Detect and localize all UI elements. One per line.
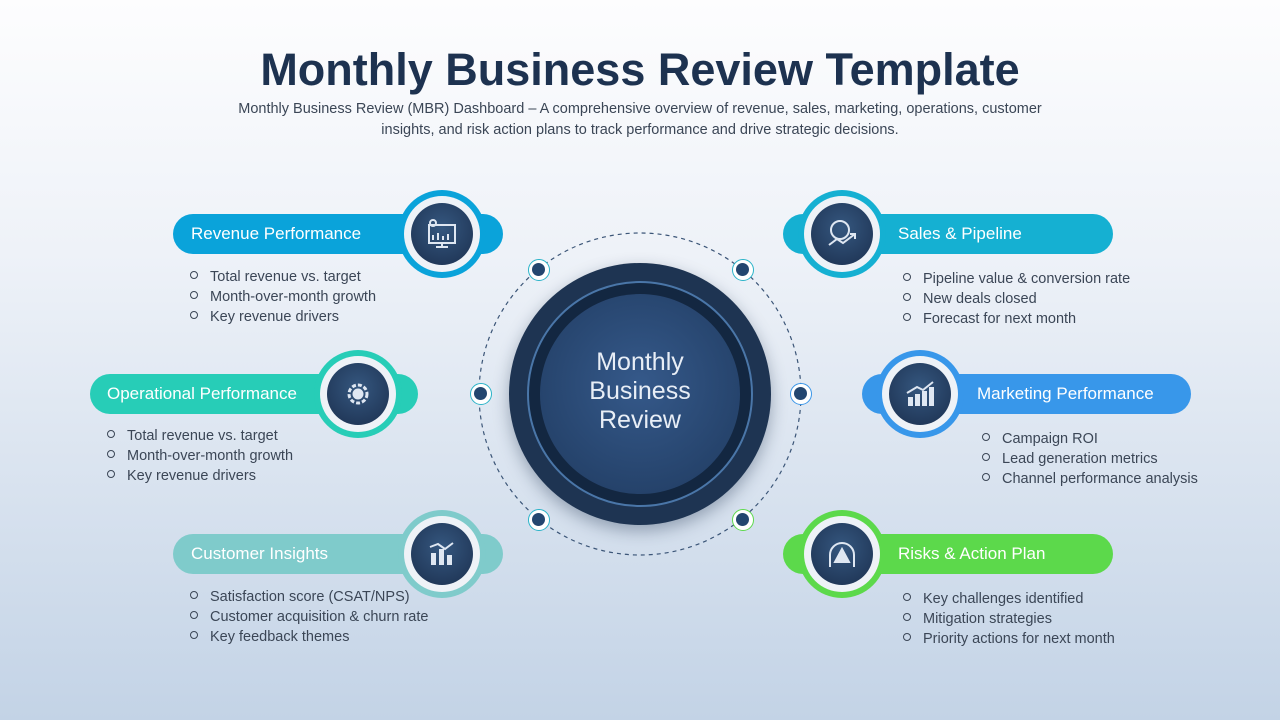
panel: customer insights — [173, 510, 503, 645]
panel: risks & action plan: Key challenges identified — [923, 591, 1083, 607]
panel: operational performance: Month-over-month growth — [127, 448, 293, 464]
panel: customer insights: Customer Insights — [191, 544, 328, 563]
dashed ring — [479, 232, 802, 556]
panel: revenue performance: Key revenue drivers — [210, 309, 339, 325]
hub text — [589, 348, 691, 434]
panel: revenue performance — [173, 190, 503, 325]
panel: customer insights: Key feedback themes — [210, 629, 349, 645]
panel: marketing performance: Marketing Performance — [977, 384, 1154, 403]
panel: customer insights: Customer acquisition & churn rate — [210, 609, 428, 625]
panel: sales & pipeline: Pipeline value & conversion rate — [923, 271, 1130, 287]
panel: revenue performance: Total revenue vs. target — [210, 269, 361, 285]
hub text: Monthly — [596, 348, 684, 376]
panel: risks & action plan: Priority actions for next month — [923, 631, 1115, 647]
panel: operational performance: Key revenue drivers — [127, 468, 256, 484]
hub text: Business — [589, 377, 691, 405]
panel: marketing performance: Campaign ROI — [1002, 431, 1098, 447]
panel: sales & pipeline: New deals closed — [923, 291, 1037, 307]
panel: sales & pipeline — [783, 190, 1130, 327]
panel: marketing performance: Channel performance analysis — [1002, 471, 1198, 487]
panel: operational performance: Total revenue vs. target — [127, 428, 278, 444]
panel: marketing performance: Lead generation metrics — [1002, 451, 1158, 467]
hub text: Review — [599, 406, 681, 434]
panel: operational performance: Operational Performance — [107, 384, 297, 403]
panel: customer insights: Satisfaction score (CSAT/NPS) — [210, 589, 410, 605]
panel: risks & action plan: Risks & Action Plan — [898, 544, 1045, 563]
panel: marketing performance — [862, 350, 1198, 487]
subtitle: Monthly Business Review (MBR) Dashboard – A comprehensive overview of revenue, sales, marketing, operations, customer insights, and risk action plans to track performance and drive strategic decisions. — [238, 101, 1042, 138]
title: Monthly Business Review Template — [260, 44, 1020, 95]
panel: sales & pipeline: Sales & Pipeline — [898, 224, 1022, 243]
panel: revenue performance: Revenue Performance — [191, 224, 361, 243]
panel: operational performance — [90, 350, 418, 484]
panel: sales & pipeline: Forecast for next month — [923, 311, 1076, 327]
panel: risks & action plan: Mitigation strategies — [923, 611, 1052, 627]
panel: risks & action plan — [783, 510, 1115, 647]
center hub — [509, 263, 771, 525]
panel: revenue performance: Month-over-month growth — [210, 289, 376, 305]
